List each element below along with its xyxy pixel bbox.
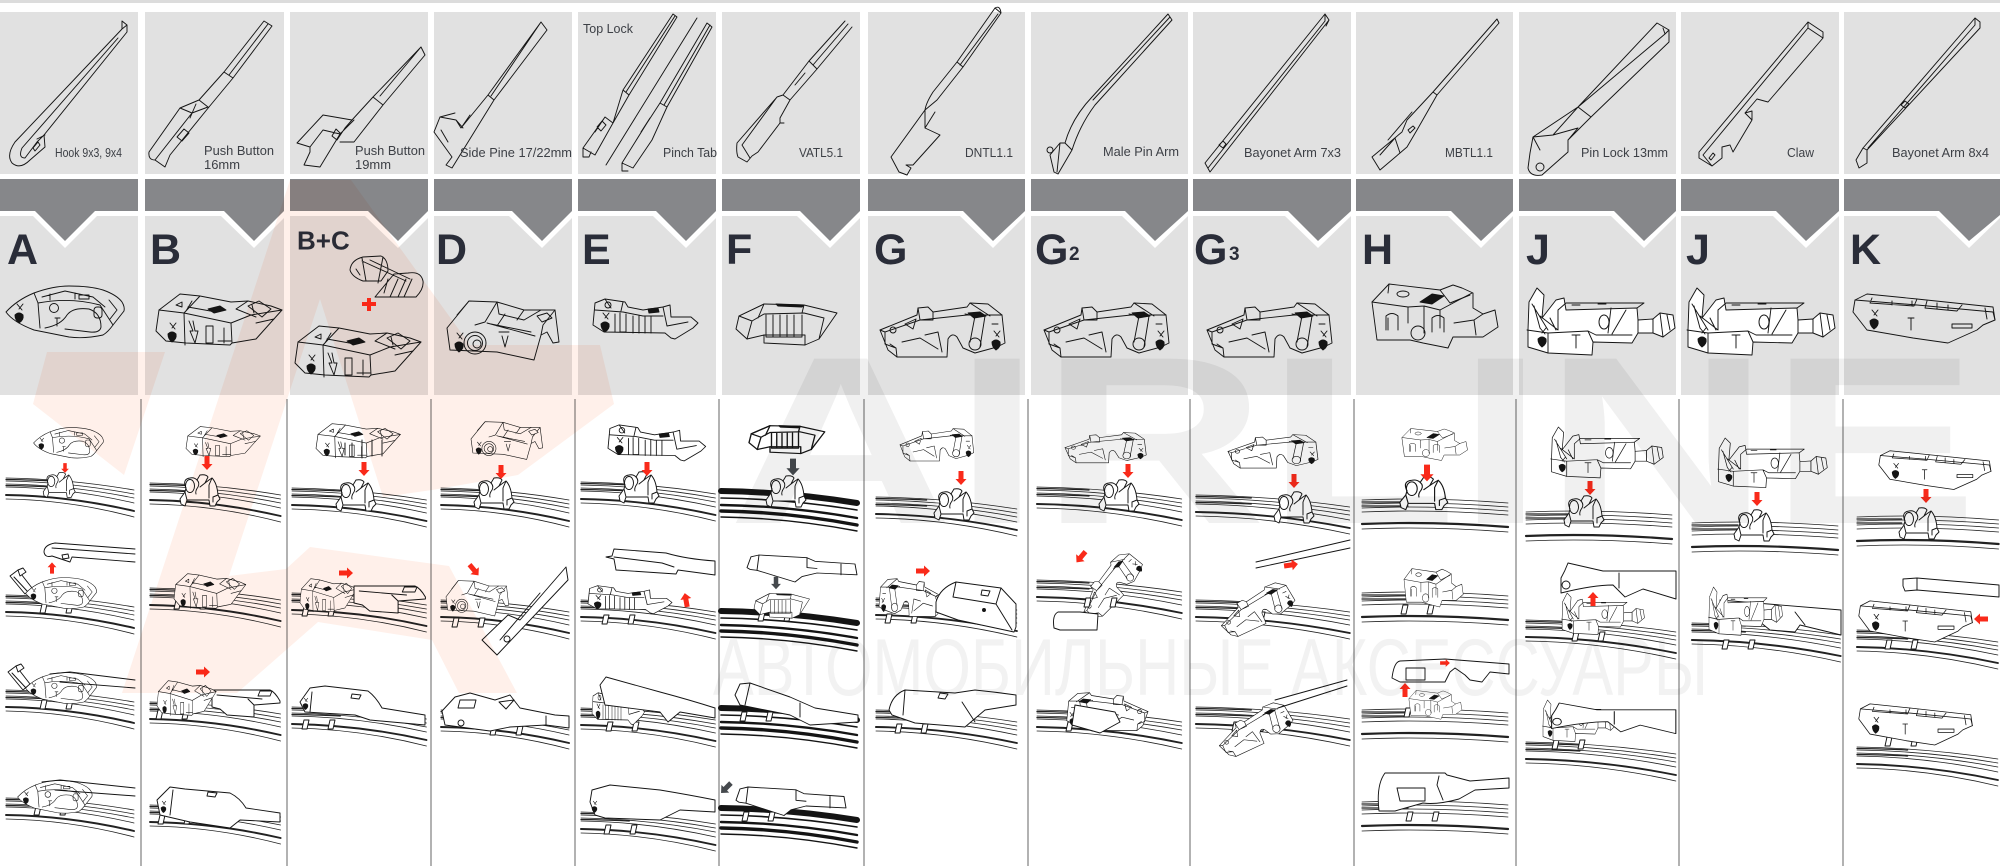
watermark logo and wordmark: АВТОМОБИЛЬНЫЕ АКСЕССУАРЫ <box>713 623 1708 713</box>
connector letters: J <box>1526 226 1550 274</box>
connector G <box>880 303 1005 357</box>
steps column J <box>1526 427 1676 781</box>
arm labels: DNTL1.1 <box>965 145 1013 160</box>
connector letters: G <box>1194 226 1227 274</box>
arm: MBTL <box>1372 19 1499 170</box>
connector B lower <box>295 326 421 377</box>
arm labels: Hook 9x3, 9x4 <box>55 145 122 160</box>
connector letters: D <box>436 226 467 274</box>
connector panels <box>0 216 2000 395</box>
arm: hook <box>10 21 127 166</box>
connector K <box>1853 294 1995 343</box>
arm: bayonet 8x4 <box>1856 18 1980 168</box>
arm adapter panels <box>0 12 2000 174</box>
arm: male pin <box>1050 14 1172 174</box>
connector letters: B <box>150 226 181 274</box>
connector G2 <box>1044 303 1169 357</box>
arm labels: Claw <box>1787 145 1815 160</box>
steps column H <box>1362 428 1509 834</box>
steps column D <box>441 422 569 749</box>
arm labels: Male Pin Arm <box>1103 144 1179 159</box>
steps column E <box>581 425 715 851</box>
connector letters: B+C <box>297 226 350 256</box>
connector letters: E <box>582 226 611 274</box>
connector letters: 2 <box>1069 244 1080 265</box>
steps column B <box>150 427 281 844</box>
connector letters: A <box>7 226 38 274</box>
connector letters: F <box>726 226 752 274</box>
grey chevron bands <box>0 179 2000 241</box>
connector letters: H <box>1362 226 1393 274</box>
steps column K <box>1857 451 1999 786</box>
arm: claw <box>1699 22 1823 166</box>
arm: pin lock 13mm <box>1528 23 1669 175</box>
steps column G3 <box>1196 435 1350 761</box>
column separators <box>141 399 1843 866</box>
connector letters <box>7 226 1881 274</box>
arm: VATL <box>737 21 852 162</box>
arm: bayonet 7x3 <box>1205 14 1329 172</box>
arm labels: Pinch Tab <box>663 145 717 160</box>
arm labels: Side Pine 17/22mm <box>460 145 572 160</box>
connector F <box>736 304 837 345</box>
connector A <box>6 286 124 338</box>
connector D <box>447 301 559 360</box>
arm labels: VATL5.1 <box>799 145 843 160</box>
plus sign <box>362 298 376 311</box>
connector J second <box>1687 288 1835 355</box>
connector drawings <box>6 256 1995 377</box>
steps column C <box>292 424 426 746</box>
arm: push button 16mm <box>149 21 272 167</box>
arm: side pin <box>434 22 547 168</box>
arm labels: 19mm <box>355 157 391 172</box>
steps column F <box>717 426 858 848</box>
adapter arms row <box>10 7 1980 175</box>
arm labels: Bayonet Arm 8x4 <box>1892 145 1989 160</box>
arm labels: Top Lock <box>583 21 633 36</box>
connector letters: K <box>1850 226 1881 274</box>
connector H <box>1372 284 1498 348</box>
connector B <box>156 294 282 345</box>
arm labels: Bayonet Arm 7x3 <box>1244 145 1341 160</box>
top rule <box>0 0 2000 3</box>
arm labels: Push Button <box>204 143 274 158</box>
arm labels: MBTL1.1 <box>1445 145 1493 160</box>
connector J <box>1527 288 1675 355</box>
arm labels: Push Button <box>355 143 425 158</box>
arm: push button 19mm <box>297 47 425 167</box>
arm labels: Pin Lock 13mm <box>1581 145 1668 160</box>
steps column G <box>876 429 1017 749</box>
steps column G2 <box>1037 433 1182 749</box>
connector letters: J <box>1686 226 1710 274</box>
arm: top lock and pinch tab <box>583 14 712 171</box>
connector letters: 3 <box>1229 244 1240 265</box>
connector letters: G <box>1035 226 1068 274</box>
fitting steps <box>6 422 1999 851</box>
steps column A <box>6 428 135 837</box>
clip C <box>350 256 423 297</box>
arm: DNTL <box>891 7 1001 175</box>
steps column J second <box>1692 438 1841 662</box>
arm labels <box>55 21 1989 172</box>
connector letters: G <box>874 226 907 274</box>
arm labels: 16mm <box>204 157 240 172</box>
connector E <box>593 299 698 339</box>
connector G3 <box>1207 303 1332 357</box>
watermark logo and wordmark: AIRLINE <box>728 307 1978 574</box>
